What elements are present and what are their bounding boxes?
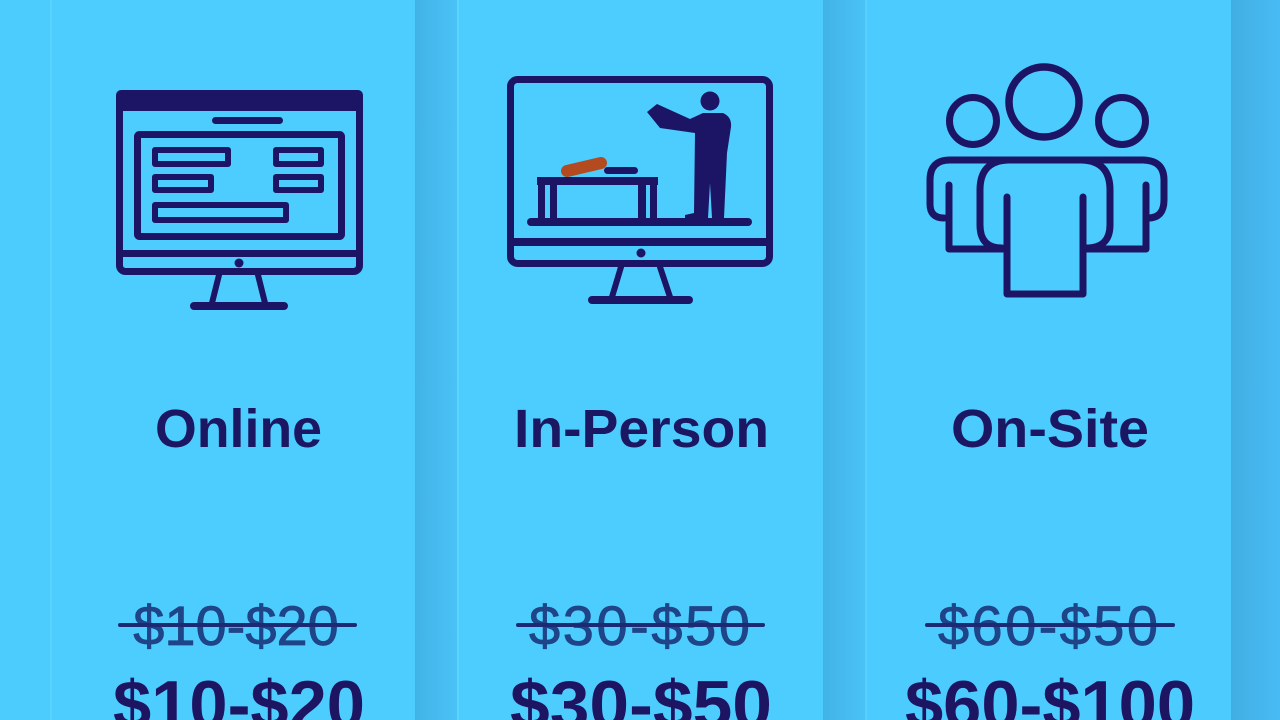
old price: $10-$20: $10-$20: [133, 594, 339, 657]
label: Online: Online: [155, 399, 322, 459]
old price: $60-$50: $60-$50: [938, 594, 1158, 657]
panel: online: [52, 0, 415, 720]
icon: monitor with form: [116, 90, 363, 310]
icon: instructor silhouette: [647, 92, 731, 218]
icon: monitor with instructor: [510, 80, 770, 304]
panel: in-person: [459, 0, 823, 720]
icon: red marker: [567, 163, 601, 171]
old price: $30-$50: $30-$50: [529, 594, 750, 657]
label: On-Site: On-Site: [951, 399, 1149, 459]
icon: group of people: [930, 67, 1164, 294]
panel: on-site: [867, 0, 1231, 720]
label: In-Person: In-Person: [514, 399, 769, 459]
